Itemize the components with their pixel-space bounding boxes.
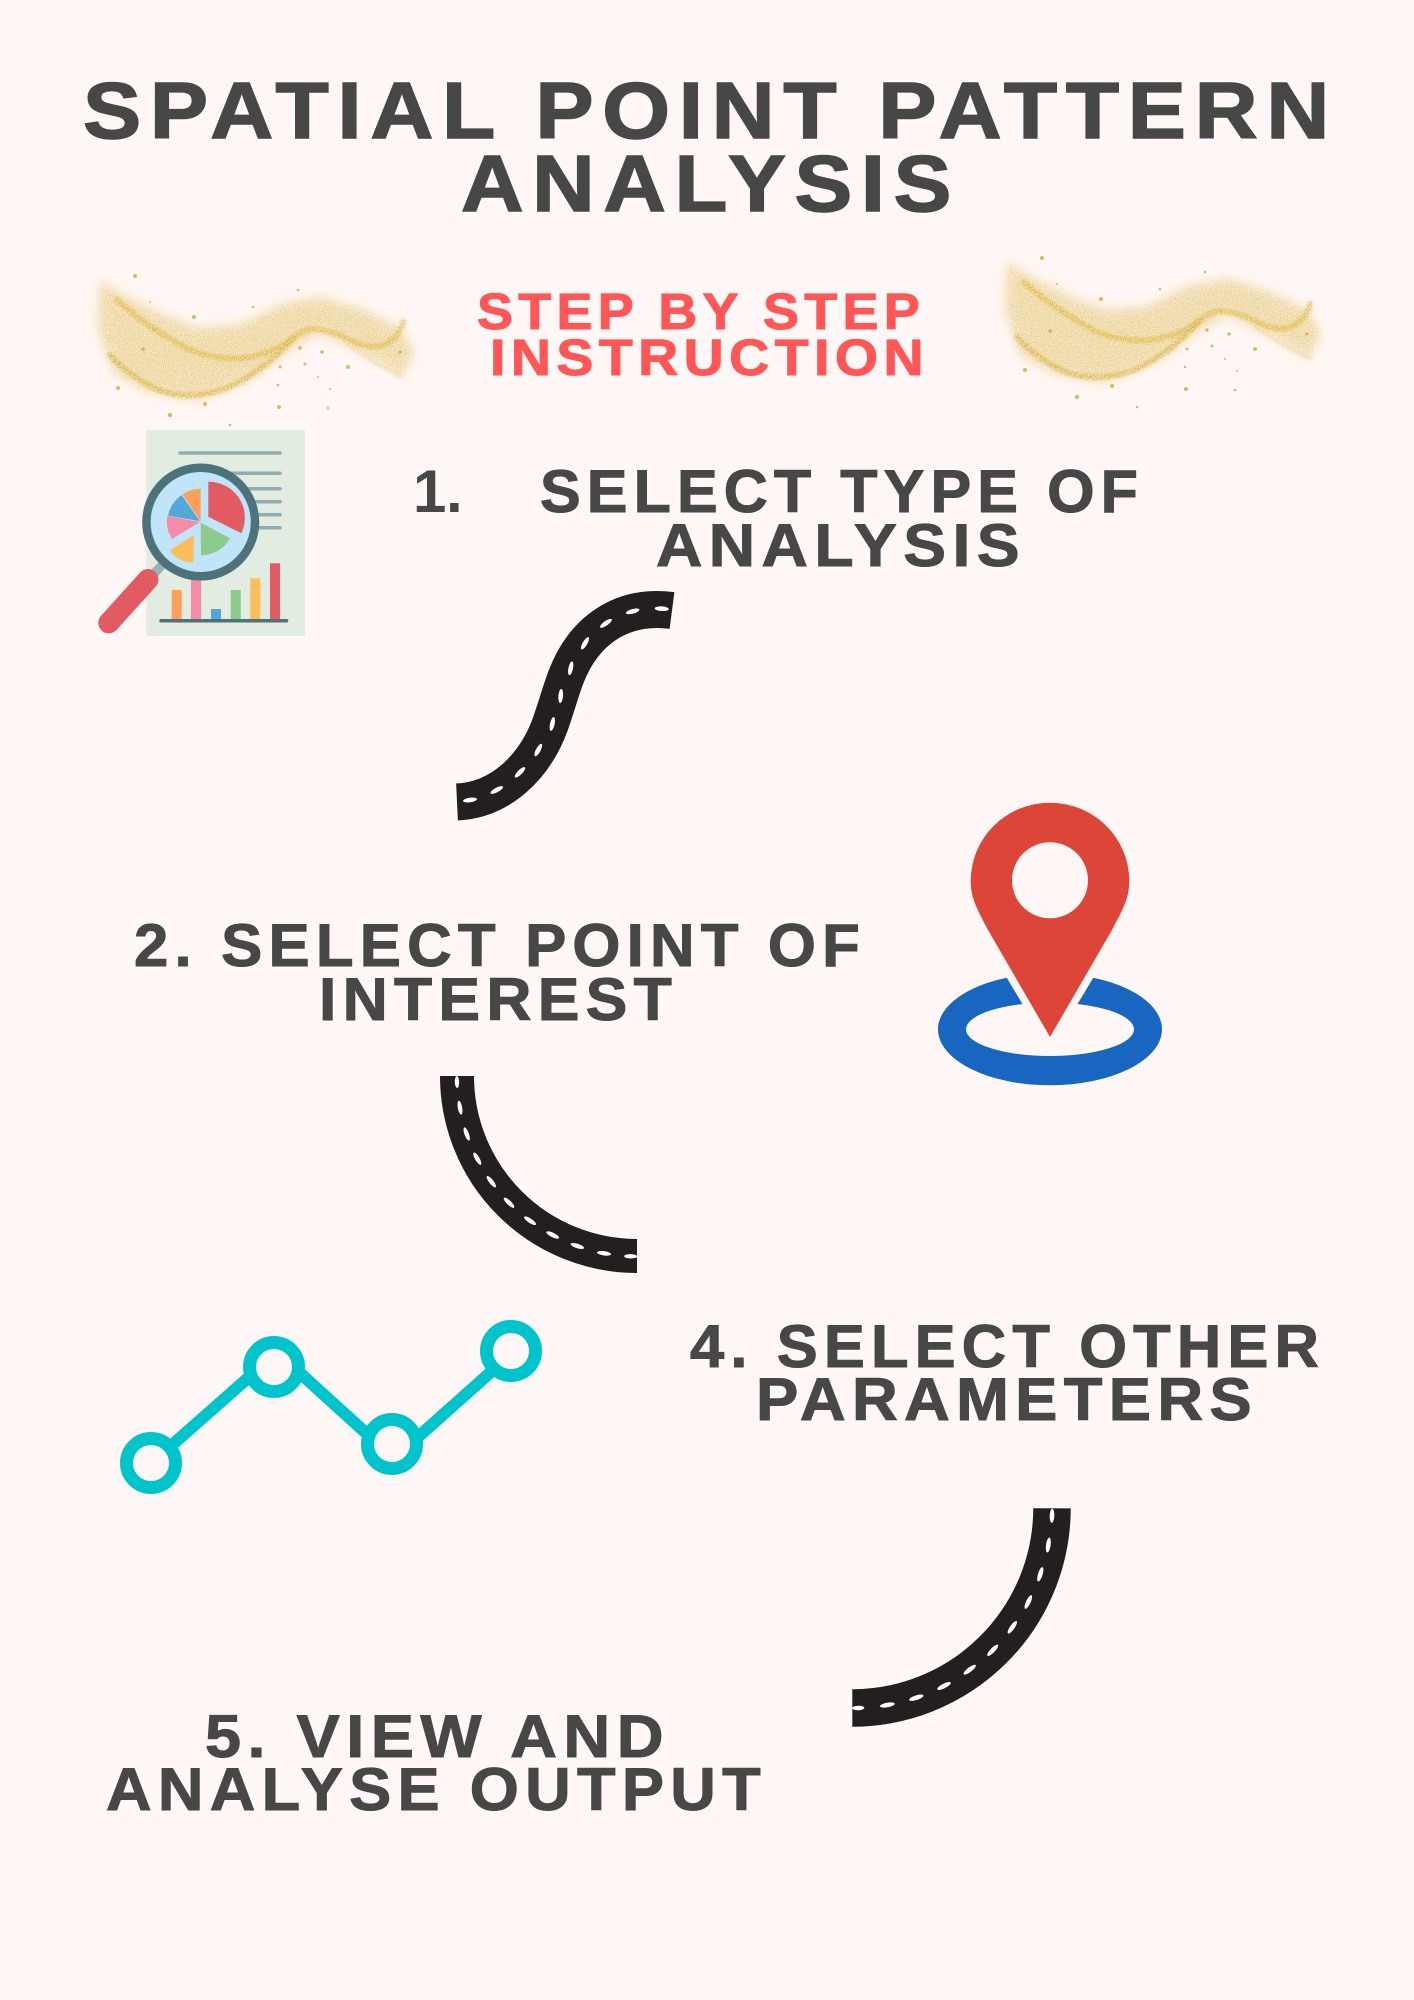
step 5 heading: ANALYSE OUTPUT xyxy=(106,1756,767,1823)
document page xyxy=(146,430,305,636)
step 1 heading xyxy=(413,458,1144,579)
subtitle: step by step instruction: INSTRUCTION xyxy=(490,329,929,386)
subtitle: step by step instruction: STEP BY STEP xyxy=(477,283,925,340)
step 1 heading: ANALYSIS xyxy=(656,512,1026,579)
title: SPATIAL POINT PATTERN xyxy=(83,66,1338,155)
magnifier lens xyxy=(146,468,255,576)
step 1 heading: 1. xyxy=(413,458,463,525)
icon: report with magnifying glass xyxy=(109,430,305,636)
gold dust swirl left xyxy=(98,274,414,426)
step 4 heading: PARAMETERS xyxy=(756,1366,1258,1433)
icon: line graph xyxy=(126,1326,536,1488)
step 5 heading: 5. VIEW AND xyxy=(205,1703,670,1770)
document text lines xyxy=(180,453,280,528)
step 4 heading: 4. SELECT OTHER xyxy=(690,1313,1325,1380)
pin marker xyxy=(971,803,1129,1037)
icon: map location pin xyxy=(938,803,1162,1085)
pie chart xyxy=(167,482,245,563)
step 4 heading xyxy=(690,1313,1325,1433)
gold dust swirl right xyxy=(1005,256,1321,408)
road arrow 4 to 5 xyxy=(852,1508,1055,1711)
road arrow 2 to 4 xyxy=(455,1076,637,1259)
road arrow 1 to 2 xyxy=(457,606,672,803)
step 2 heading xyxy=(134,912,866,1033)
title xyxy=(83,66,1338,228)
bar chart xyxy=(161,563,286,621)
step 2 heading: 2. SELECT POINT OF xyxy=(134,912,866,979)
magnifier handle xyxy=(109,563,164,623)
pin base ring xyxy=(938,973,1162,1085)
step 1 heading: SELECT TYPE OF xyxy=(540,458,1144,525)
step 2 heading: INTEREST xyxy=(319,966,678,1033)
step 5 heading xyxy=(106,1703,767,1823)
title: ANALYSIS xyxy=(461,139,960,228)
subtitle: step by step instruction xyxy=(477,283,929,386)
